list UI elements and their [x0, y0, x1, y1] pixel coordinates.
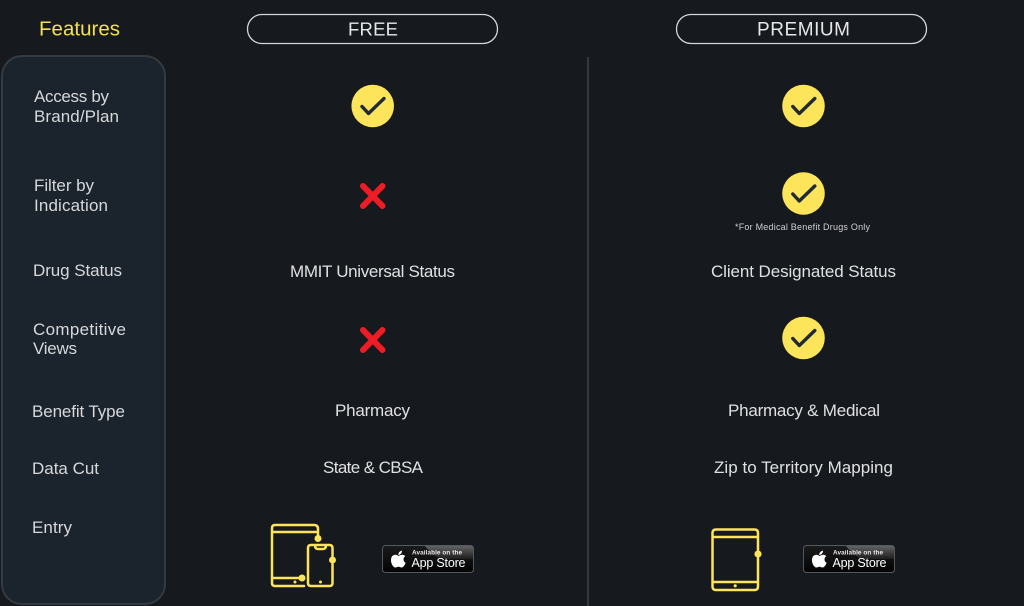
icon: free cross, filter by indication	[363, 186, 382, 206]
label: Filter by Indication: Indication	[34, 196, 108, 215]
text: premium drug status: Client Designated Status	[711, 262, 896, 281]
text: premium benefit type: Pharmacy & Medical	[728, 401, 880, 420]
icon: tablet	[712, 530, 762, 590]
label: Access by Brand/Plan	[34, 87, 119, 126]
label: Competitive Views: Views	[33, 339, 77, 358]
text: free drug status: MMIT Universal Status	[290, 262, 455, 281]
heading pill: PREMIUM	[676, 14, 926, 44]
panel: feature names	[2, 56, 165, 604]
heading: Features: Features	[39, 18, 120, 40]
badge: App Store, free	[382, 546, 474, 572]
icon: premium check, access by brand/plan	[782, 85, 825, 127]
text: premium data cut: Zip to Territory Mapping	[714, 458, 893, 477]
label: Filter by Indication	[34, 176, 108, 215]
badge: App Store, free: App Store	[412, 556, 466, 570]
footnote: medical benefit drugs only: *For Medical Benefit Drugs Only	[735, 222, 870, 232]
heading pill: FREE	[248, 14, 498, 44]
text: free benefit type: Pharmacy	[335, 401, 410, 420]
heading pill: FREE: FREE	[348, 18, 398, 40]
badge: App Store, premium: App Store	[832, 556, 887, 570]
label: Data Cut: Data Cut	[32, 459, 99, 478]
label: Competitive Views	[33, 320, 126, 358]
icon: apple logo	[812, 551, 827, 568]
icon: premium check, competitive views	[782, 317, 825, 359]
label: Competitive Views: Competitive	[33, 320, 126, 339]
icon: tablet and phone	[272, 525, 336, 586]
badge: App Store, premium: Available on the	[833, 550, 883, 556]
badge: App Store, premium	[804, 546, 894, 572]
icon: premium check, filter by indication	[782, 172, 825, 215]
label: Entry: Entry	[32, 518, 72, 537]
icon: apple logo	[391, 551, 406, 568]
label: Access by Brand/Plan: Access by	[34, 87, 110, 106]
label: Filter by Indication: Filter by	[34, 176, 94, 195]
icon: free cross, competitive views	[363, 330, 382, 350]
label: Benefit Type: Benefit Type	[32, 402, 125, 421]
label: Drug Status: Drug Status	[33, 261, 122, 280]
icon: free check, access by brand/plan	[351, 85, 394, 127]
text: free data cut: State & CBSA	[323, 458, 424, 477]
label: Access by Brand/Plan: Brand/Plan	[34, 107, 119, 126]
heading pill: PREMIUM: PREMIUM	[757, 20, 850, 40]
badge: App Store, free: Available on the	[412, 550, 462, 556]
